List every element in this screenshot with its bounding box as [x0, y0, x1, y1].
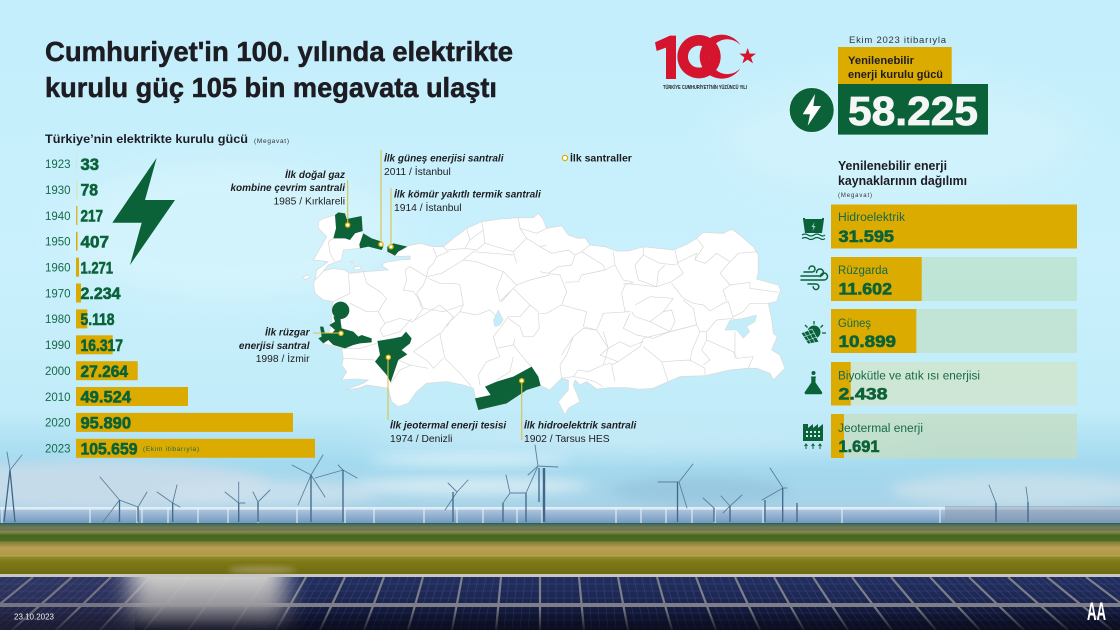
provinces base — [303, 213, 785, 415]
icon: energy circle — [789, 88, 834, 132]
row: wind — [831, 257, 1077, 301]
values: 2.234 — [80, 285, 121, 303]
years: 1960 — [45, 262, 71, 274]
row: wind: 11.602 — [838, 280, 892, 298]
bars — [76, 154, 315, 458]
icon: biomass flask — [805, 371, 822, 394]
years: 2023 — [45, 444, 71, 456]
callout: wind plant: 1998 / İzmir — [256, 352, 310, 365]
icon: solar panel — [801, 321, 826, 344]
field — [0, 523, 1120, 575]
logo: Türkiye Cumhuriyeti'nin 100. yılı: TÜRKİYE CUMHURİYETİ'NİN YÜZÜNCÜ YILI — [663, 84, 747, 91]
callout: natural gas plant: İlk doğal gaz — [285, 168, 345, 181]
date: 23.10.2023 — [14, 612, 55, 622]
icon: hydro dam — [802, 218, 825, 240]
value box: 58.225 — [848, 88, 978, 134]
title: kurulu güç 105 bin megavata ulaştı — [45, 72, 497, 103]
values: 78 — [80, 182, 98, 200]
province: Denizli — [375, 332, 412, 382]
row: biomass — [831, 362, 1077, 406]
lakes — [493, 310, 757, 338]
row: geothermal: 1.691 — [838, 438, 880, 456]
years: 1990 — [45, 340, 71, 352]
date note: Ekim 2023 itibarıyla — [849, 35, 947, 46]
callout: hydroelectric plant — [524, 418, 636, 445]
title: Cumhuriyet'in 100. yılında elektrikte — [45, 36, 513, 67]
values: 1.271 — [80, 259, 113, 277]
map of Türkiye — [303, 212, 785, 415]
callout: geothermal plant — [390, 418, 506, 445]
years: 2000 — [45, 366, 71, 378]
values: 49.524 — [80, 389, 132, 407]
callout: wind plant: İlk rüzgar — [265, 326, 311, 338]
leader lines — [313, 150, 522, 440]
logo: Türkiye Cumhuriyeti'nin 100. yılı — [655, 35, 756, 91]
callout: solar plant — [384, 152, 504, 178]
years — [45, 159, 71, 456]
callout: natural gas plant — [230, 168, 345, 208]
landscape: wind farm horizon — [0, 445, 1120, 575]
icon: geothermal plant — [803, 424, 823, 449]
province borders west — [328, 218, 550, 387]
row: geothermal: Jeotermal enerji — [838, 423, 923, 435]
years: 2020 — [45, 418, 71, 430]
heading: renewable distribution: (Megavat) — [838, 193, 872, 199]
landscape: solar panels — [0, 574, 1120, 630]
callout: geothermal plant: 1974 / Denizli — [390, 434, 452, 445]
heading: renewable distribution: Yenilenebilir enerji — [838, 159, 947, 173]
heading: installed capacity: Türkiye’nin elektrikte kurulu gücü — [45, 134, 248, 146]
turbine towers — [4, 468, 1028, 522]
callout: wind plant — [239, 326, 311, 365]
title — [45, 36, 513, 103]
label box: enerji kurulu gücü — [848, 69, 943, 81]
values: 105.659 — [80, 440, 138, 458]
years: 1940 — [45, 211, 71, 223]
values: 5.118 — [80, 311, 114, 329]
years: 1950 — [45, 236, 71, 248]
values: 95.890 — [80, 414, 131, 432]
heading: renewable distribution — [838, 159, 967, 199]
turbine blades — [7, 445, 1028, 522]
province: İstanbul Europe — [359, 233, 383, 250]
row: wind: Rüzgarda — [838, 265, 889, 277]
map markers — [339, 223, 524, 383]
province: Kırklareli-Tekirdağ — [333, 212, 363, 240]
callout: coal plant: 1914 / İstanbul — [394, 201, 462, 214]
years: 1980 — [45, 314, 71, 326]
label box — [838, 47, 952, 84]
province: Mersin — [475, 367, 541, 410]
panel: renewable capacity — [789, 35, 988, 135]
values: 16.317 — [80, 337, 123, 355]
row: hydroelectric: Hidroelektrik — [838, 212, 905, 224]
panel: installed capacity bar chart — [45, 134, 315, 458]
province: İzmir — [318, 302, 372, 348]
label box: Yenilenebilir — [848, 55, 915, 67]
callout: natural gas plant: kombine çevrim santrali — [230, 183, 345, 194]
row: hydroelectric — [831, 204, 1077, 248]
row: solar: Güneş — [838, 318, 871, 330]
values: 33 — [80, 156, 99, 174]
years: 1923 — [45, 159, 71, 171]
callout: wind plant: enerjisi santral — [239, 341, 310, 352]
heading: installed capacity: (Megavat) — [254, 138, 289, 145]
icon: wind — [801, 266, 828, 290]
callout: natural gas plant: 1985 / Kırklareli — [273, 196, 345, 208]
years: 2010 — [45, 392, 71, 404]
note: as of October: (Ekim itibarıyla) — [143, 446, 199, 453]
callout: coal plant — [394, 188, 541, 214]
values — [80, 156, 138, 458]
years: 1970 — [45, 288, 71, 300]
province borders east — [540, 238, 778, 387]
icon: lightning bolt — [112, 158, 175, 265]
row: solar: 10.899 — [838, 333, 896, 351]
callout: solar plant: 2011 / İstanbul — [384, 165, 451, 178]
years: 1930 — [45, 185, 71, 197]
callout: hydroelectric plant: İlk hidroelektrik santrali — [524, 418, 636, 432]
legend: first plants: İlk santraller — [570, 152, 632, 164]
province: İstanbul Asia — [387, 243, 407, 256]
heading: renewable distribution: kaynaklarının dağılımı — [838, 174, 967, 188]
row: biomass: 2.438 — [838, 386, 888, 404]
row: hydroelectric: 31.595 — [838, 228, 894, 246]
callout: coal plant: İlk kömür yakıtlı termik santrali — [394, 188, 541, 200]
row: biomass: Biyokütle ve atık ısı enerjisi — [838, 370, 980, 382]
values: 217 — [80, 208, 103, 226]
values: 407 — [80, 233, 109, 251]
callout: hydroelectric plant: 1902 / Tarsus HES — [524, 434, 610, 445]
row: solar — [831, 309, 1077, 353]
row: geothermal — [831, 414, 1077, 458]
values: 27.264 — [80, 363, 129, 381]
callout: geothermal plant: İlk jeotermal enerji tesisi — [390, 418, 506, 432]
callout: solar plant: İlk güneş enerjisi santrali — [384, 152, 504, 164]
